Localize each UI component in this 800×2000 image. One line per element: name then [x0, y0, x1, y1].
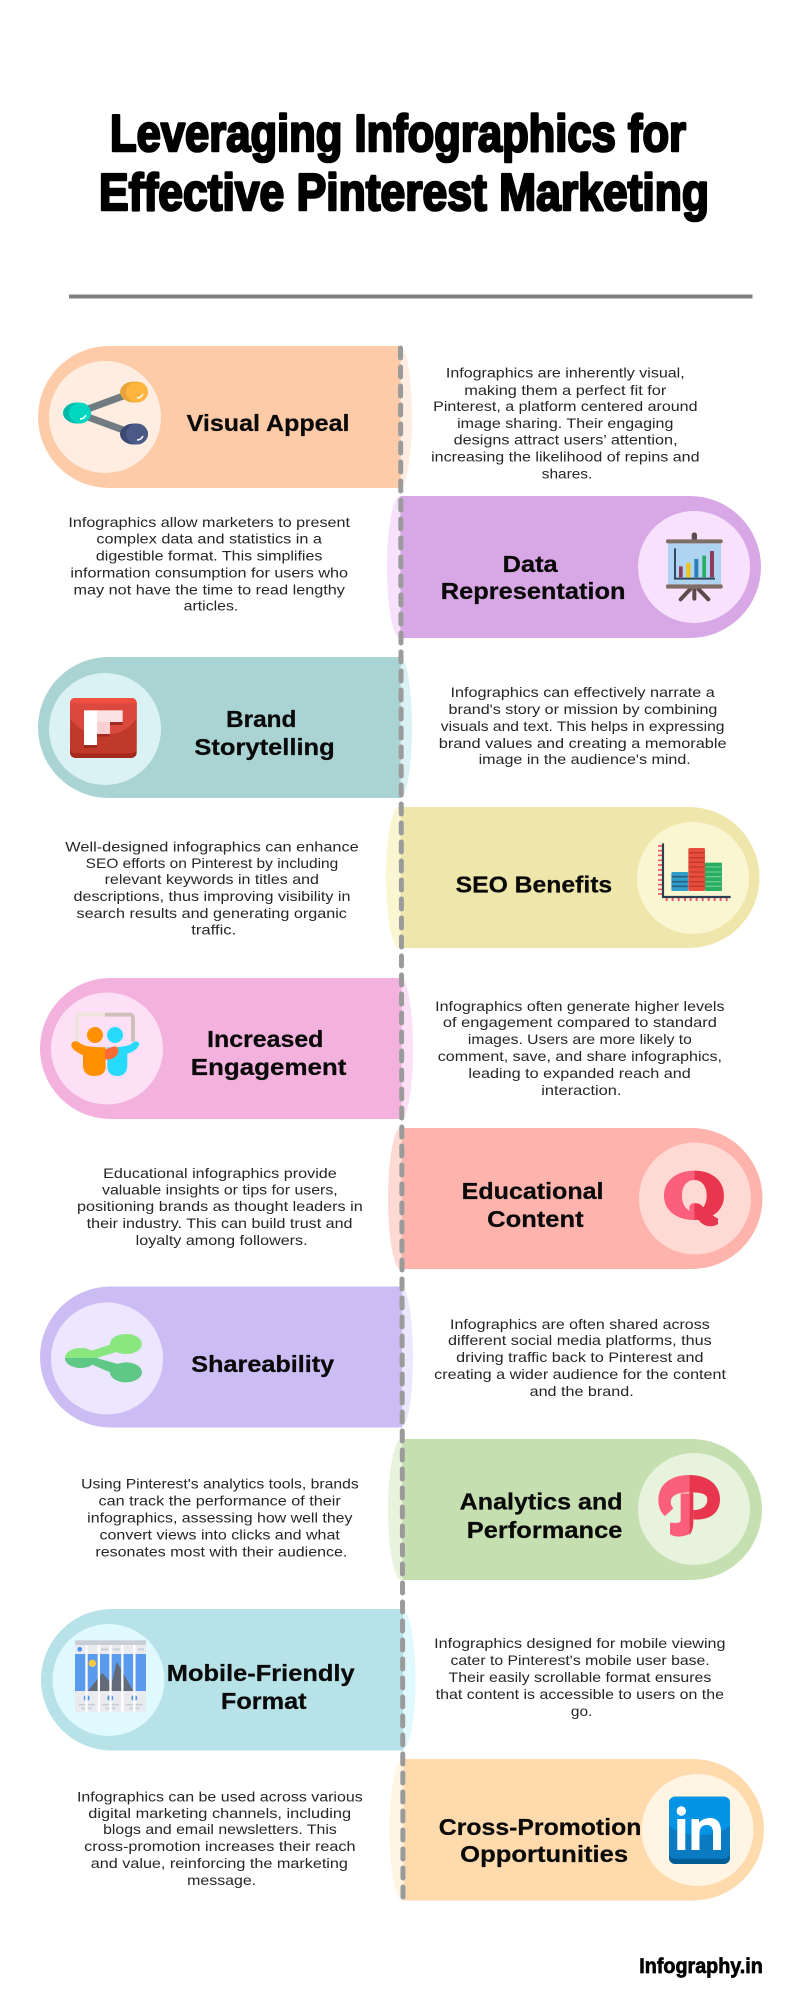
icon: linkedin logo	[669, 1797, 730, 1864]
icon: presentation board	[666, 535, 723, 599]
heading: Mobile-Friendly	[167, 1660, 355, 1686]
text: cross-promotion opportunities: message.	[187, 1872, 256, 1888]
text: mobile-friendly format: that content is accessible to users on the	[436, 1686, 724, 1702]
icon: bar chart	[658, 843, 731, 901]
panel: seo benefits	[386, 806, 760, 948]
text: visual appeal: shares.	[542, 465, 592, 481]
text: shareability: different social media platforms, thus	[448, 1332, 712, 1348]
heading: Analytics and	[460, 1489, 622, 1515]
text: seo benefits: descriptions, thus improving visibility in	[74, 888, 350, 904]
text: visual appeal: Infographics are inherently visual,	[446, 365, 685, 381]
icon: share nodes	[63, 382, 148, 444]
text: brand storytelling: brand values and creating a memorable	[439, 735, 727, 751]
text: analytics and performance: Using Pinterest's analytics tools, brands	[81, 1475, 359, 1491]
heading: Increased	[207, 1026, 323, 1052]
text: data representation	[68, 514, 350, 613]
icon: pinterest P	[658, 1475, 720, 1536]
text: shareability: creating a wider audience for the content	[434, 1366, 726, 1382]
text: seo benefits: Well-designed infographics can enhance	[65, 838, 359, 854]
text: cross-promotion opportunities: Infographics can be used across various	[77, 1789, 363, 1805]
panel: educational content	[388, 1128, 762, 1270]
text: visual appeal	[431, 365, 700, 481]
panel: data representation	[387, 496, 761, 638]
icon: two people hugging	[71, 1015, 139, 1076]
text: seo benefits: traffic.	[191, 922, 236, 938]
text: brand storytelling: Infographics can effectively narrate a	[450, 684, 715, 700]
heading: Engagement	[191, 1054, 347, 1080]
brand footer: Infography.in	[639, 1955, 763, 1978]
text: data representation: digestible format. This simplifies	[96, 548, 322, 564]
text: cross-promotion opportunities: and value, reinforcing the marketing	[91, 1855, 348, 1871]
text: cross-promotion opportunities: digital marketing channels, including	[88, 1805, 351, 1821]
icon: flipboard logo	[70, 698, 137, 758]
text: educational content: their industry. This can build trust and	[87, 1215, 352, 1231]
text: mobile-friendly format	[434, 1635, 726, 1719]
text: cross-promotion opportunities	[77, 1789, 363, 1888]
text: data representation: information consumption for users who	[70, 564, 348, 580]
text: analytics and performance: infographics, assessing how well they	[87, 1509, 352, 1525]
heading	[439, 1814, 641, 1867]
heading: Educational	[462, 1178, 604, 1204]
text: data representation: may not have the time to read lengthy	[74, 582, 345, 598]
text: cross-promotion opportunities: blogs and email newsletters. This	[103, 1821, 337, 1837]
text: brand storytelling: image in the audience's mind.	[479, 751, 691, 767]
text: educational content: positioning brands as thought leaders in	[77, 1198, 363, 1214]
text: mobile-friendly format: Infographics designed for mobile viewing	[434, 1635, 726, 1651]
text: mobile-friendly format: Their easily scrollable format ensures	[448, 1669, 711, 1685]
title: Leveraging Infographics for	[110, 105, 686, 163]
text: data representation: articles.	[184, 597, 238, 613]
heading	[194, 706, 335, 760]
text: shareability: Infographics are often shared across	[450, 1316, 710, 1332]
text: visual appeal: Pinterest, a platform centered around	[433, 398, 698, 414]
title	[99, 105, 709, 222]
panel: analytics and performance	[388, 1438, 762, 1580]
text: increased engagement: interaction.	[541, 1082, 621, 1098]
heading: Storytelling	[194, 734, 335, 760]
text: seo benefits: SEO efforts on Pinterest by including	[86, 855, 338, 871]
text: shareability: driving traffic back to Pinterest and	[456, 1349, 704, 1365]
text: shareability: and the brand.	[530, 1383, 634, 1399]
text: educational content: valuable insights or tips for users,	[102, 1182, 338, 1198]
icon: mobile gallery layout	[75, 1640, 146, 1712]
text: educational content	[77, 1165, 363, 1248]
panel: cross-promotion opportunities	[390, 1759, 764, 1901]
text: visual appeal: image sharing. Their engaging	[457, 415, 673, 431]
text: mobile-friendly format: cater to Pinterest's mobile user base.	[450, 1652, 710, 1668]
heading	[167, 1660, 355, 1714]
text: analytics and performance: convert views into clicks and what	[100, 1526, 340, 1542]
text: increased engagement: comment, save, and share infographics,	[438, 1048, 722, 1064]
panel: visual appeal	[38, 346, 412, 488]
text: increased engagement	[435, 998, 724, 1098]
text: analytics and performance	[81, 1475, 359, 1559]
text: data representation: complex data and statistics in a	[96, 531, 322, 547]
heading: Representation	[441, 578, 626, 604]
panel: increased engagement	[40, 978, 413, 1120]
text: seo benefits: search results and generating organic	[76, 905, 347, 921]
heading: Format	[221, 1688, 307, 1714]
text: seo benefits: relevant keywords in titles and	[105, 871, 319, 887]
text: shareability	[434, 1316, 726, 1399]
heading: Content	[487, 1206, 584, 1232]
heading: Data	[503, 551, 558, 577]
panel: mobile-friendly format	[41, 1609, 416, 1751]
heading: Performance	[467, 1517, 622, 1543]
text: brand storytelling: visuals and text. This helps in expressing	[441, 718, 724, 734]
text: cross-promotion opportunities: cross-promotion increases their reach	[84, 1838, 356, 1854]
heading	[460, 1489, 622, 1543]
panel: shareability	[40, 1286, 413, 1428]
text: visual appeal: making them a perfect fit for	[464, 382, 667, 398]
text: brand storytelling: brand's story or mission by combining	[448, 701, 717, 717]
text: seo benefits	[65, 838, 359, 938]
text: brand storytelling	[439, 684, 727, 767]
heading	[462, 1178, 604, 1232]
heading: Cross-Promotion	[439, 1814, 641, 1840]
icon: quora Q	[664, 1171, 724, 1226]
heading: Brand	[226, 706, 296, 732]
text: analytics and performance: resonates most with their audience.	[95, 1543, 347, 1559]
icon: green share	[65, 1334, 142, 1382]
text: educational content: Educational infographics provide	[103, 1165, 337, 1181]
text: mobile-friendly format: go.	[571, 1703, 592, 1719]
title: Effective Pinterest Marketing	[99, 164, 709, 222]
heading	[441, 551, 626, 604]
text: increased engagement: of engagement compared to standard	[443, 1014, 717, 1030]
heading	[191, 1026, 347, 1080]
text: increased engagement: Infographics often generate higher levels	[435, 998, 724, 1014]
text: increased engagement: leading to expanded reach and	[468, 1065, 691, 1081]
text: visual appeal: increasing the likelihood of repins and	[431, 448, 700, 464]
text: increased engagement: images. Users are more likely to	[468, 1031, 692, 1047]
text: educational content: loyalty among followers.	[136, 1232, 308, 1248]
panel: brand storytelling	[38, 656, 412, 798]
heading: SEO Benefits	[456, 872, 612, 898]
text: visual appeal: designs attract users’ attention,	[454, 432, 678, 448]
heading: Visual Appeal	[187, 410, 350, 436]
heading: Opportunities	[460, 1841, 628, 1867]
text: data representation: Infographics allow marketers to present	[68, 514, 350, 530]
text: analytics and performance: can track the performance of their	[98, 1492, 341, 1508]
heading: Shareability	[191, 1351, 334, 1377]
